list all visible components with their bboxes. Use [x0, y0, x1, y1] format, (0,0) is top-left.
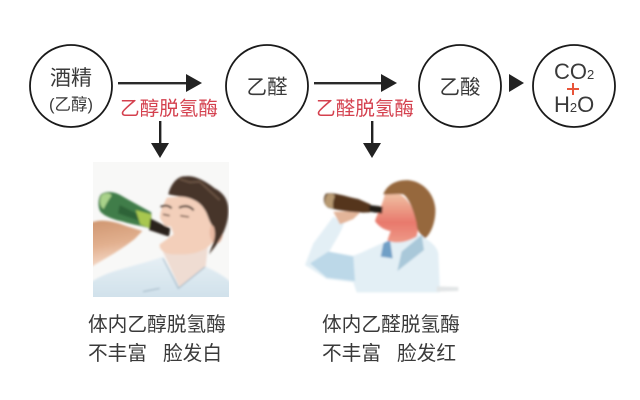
node: alcohol (ethanol)	[30, 45, 112, 127]
caption: first photo	[88, 314, 226, 365]
caption: second photo	[322, 314, 460, 365]
enzyme label: alcohol dehydrogenase: 乙醇脱氢酶	[120, 98, 218, 120]
node: acetic acid	[419, 45, 501, 127]
arrow: down to first photo	[151, 121, 169, 158]
caption: second photo: 脸发红	[397, 343, 456, 365]
enzyme label: acetaldehyde dehydrogenase: 乙醛脱氢酶	[316, 98, 414, 120]
arrow: acetic acid to end products	[509, 74, 524, 92]
node: acetaldehyde	[226, 45, 308, 127]
photo: man drinking, flushed face	[305, 180, 458, 292]
node: carbon dioxide and water: H2O	[554, 92, 594, 117]
caption: second photo: 体内乙醛脱氢酶	[322, 314, 460, 336]
arrow: alcohol to acetaldehyde	[118, 74, 202, 92]
node: carbon dioxide and water: CO2	[554, 59, 594, 84]
node: alcohol (ethanol): 酒精	[50, 67, 92, 90]
arrow: acetaldehyde to acetic acid	[314, 74, 397, 92]
node: acetic acid: 乙酸	[440, 76, 480, 99]
node: acetaldehyde: 乙醛	[246, 76, 288, 99]
arrow: down to second photo	[363, 121, 381, 158]
node: alcohol (ethanol): (乙醇)	[49, 95, 93, 114]
caption: first photo: 脸发白	[163, 343, 222, 365]
photo: man drinking, pale face	[90, 162, 231, 300]
caption: first photo: 体内乙醇脱氢酶	[88, 314, 226, 336]
node: carbon dioxide and water	[533, 45, 615, 127]
caption: first photo: 不丰富	[88, 343, 147, 365]
caption: second photo: 不丰富	[322, 343, 381, 365]
